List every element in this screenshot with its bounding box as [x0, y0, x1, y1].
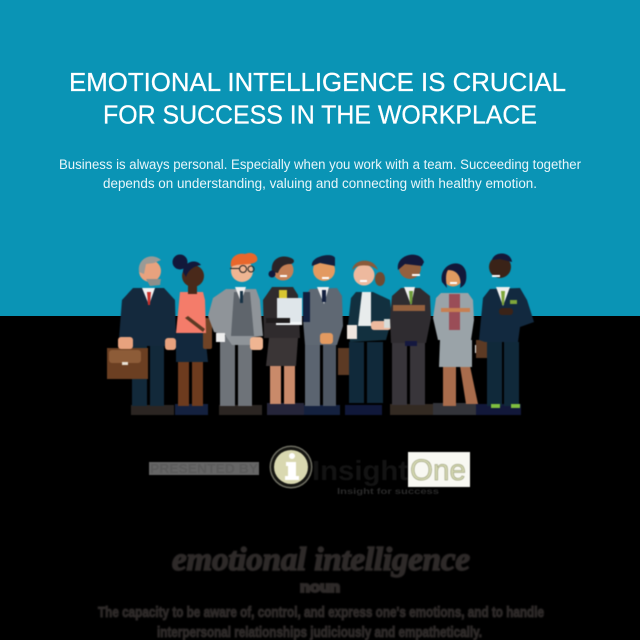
logo wordmark: Insight [312, 455, 408, 486]
person 6: woman with ponytail [338, 261, 392, 415]
person 1: older man with briefcase [107, 256, 176, 415]
person 4: woman with clipboard [263, 257, 304, 415]
title: EMOTIONAL INTELLIGENCE IS CRUCIAL [69, 69, 566, 97]
title: FOR SUCCESS IN THE WORKPLACE [103, 102, 537, 130]
sponsor line: PRESENTED BY [150, 461, 258, 476]
person 9: man in navy suit [475, 253, 534, 415]
person 3: red-haired man in grey suit [208, 253, 263, 415]
title [69, 69, 566, 130]
intro text: Business is always personal. Especially when you work with a team. Succeeding together [59, 157, 581, 172]
logo white panel [408, 452, 470, 487]
person 2: woman in coral top [172, 254, 212, 415]
definition text [98, 604, 544, 640]
intro text: depends on understanding, valuing and connecting with healthy emotion. [103, 176, 537, 191]
logo tagline: Insight for success [337, 487, 440, 496]
intro text [59, 157, 581, 191]
logo: InsightOne [270, 446, 470, 496]
logo One: One [410, 454, 466, 487]
black lower panel [0, 316, 640, 640]
teal header panel [0, 0, 640, 316]
presented by label [149, 462, 259, 475]
part of speech: noun [300, 579, 340, 596]
illustration: team of nine professionals [107, 253, 534, 415]
person 7: man with folded arms [390, 255, 434, 415]
person 8: woman in grey suit [433, 263, 478, 415]
person 5: man in slate suit [303, 255, 343, 415]
logo circle with i [270, 446, 312, 488]
definition heading: emotional intelligence [172, 542, 470, 578]
